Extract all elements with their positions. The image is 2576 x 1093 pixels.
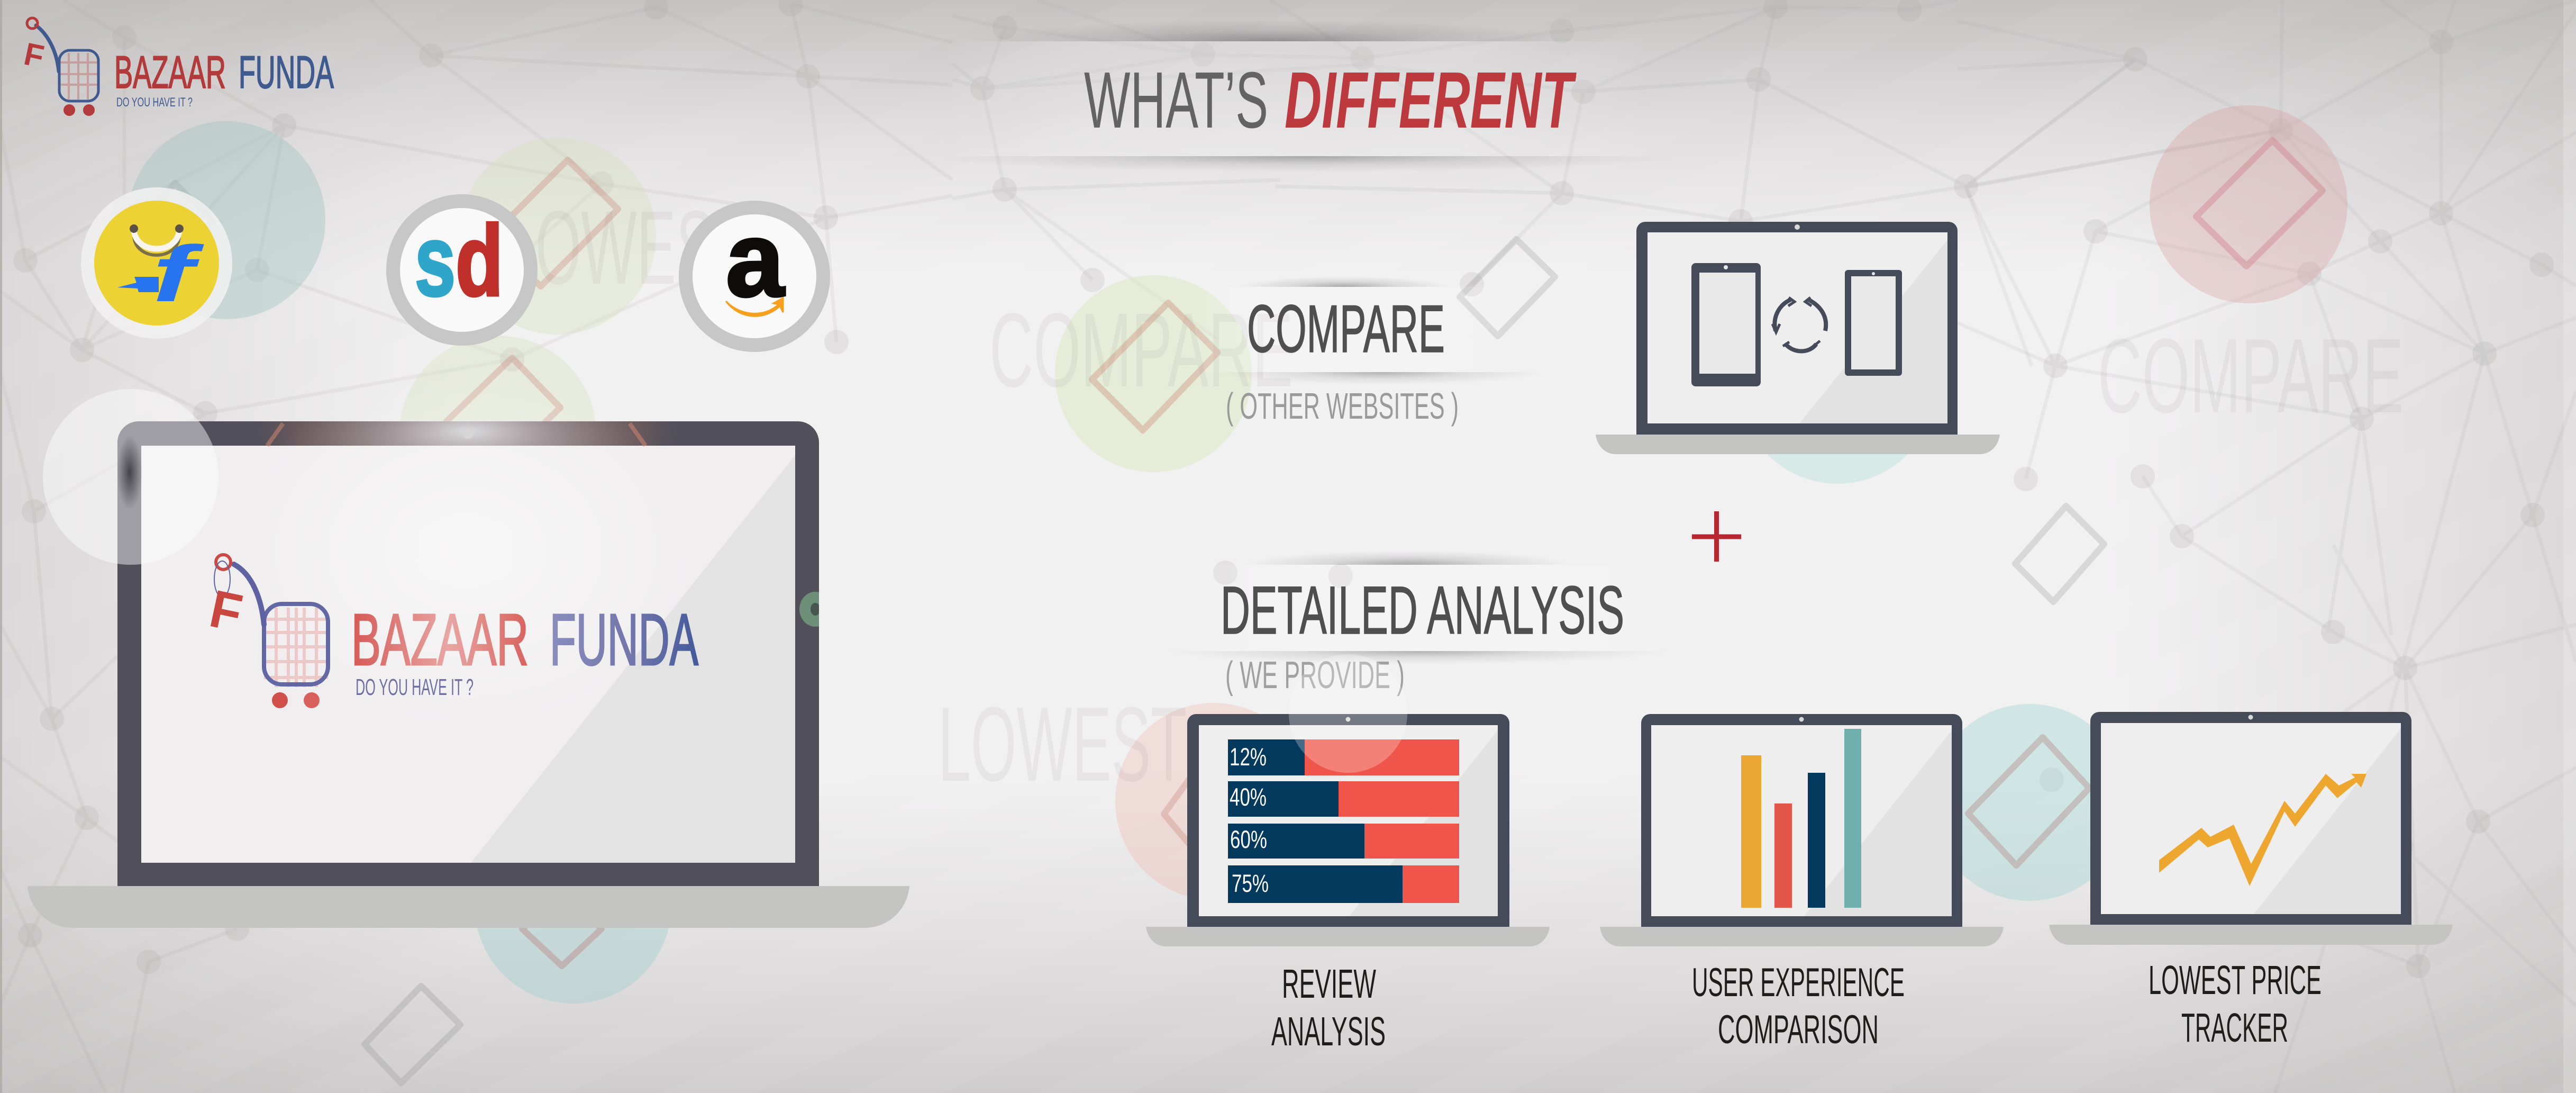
logo: Bazaar Funda small: BAZAAR — [114, 47, 226, 98]
bar 40% — [1228, 781, 1459, 817]
heading: compare — [1180, 266, 1545, 427]
snapdeal badge: d — [456, 205, 503, 317]
flipkart badge: f — [152, 229, 204, 318]
green lens spot — [799, 592, 819, 627]
logo on screen — [205, 555, 698, 708]
logo: Bazaar Funda small — [21, 18, 334, 116]
heading: compare: ( OTHER WEBSITES ) — [1226, 385, 1459, 427]
caption: lowest price tracker: TRACKER — [2181, 1005, 2288, 1051]
logo on screen: FUNDA — [550, 599, 698, 681]
title band — [942, 41, 1651, 156]
flipkart badge — [81, 187, 232, 339]
icon: large phone — [1691, 263, 1761, 386]
watermark words: LOWEST — [938, 685, 1187, 803]
laptop: review analysis bars — [1146, 714, 1550, 946]
snapdeal badge: s — [415, 205, 456, 317]
caption: lowest price tracker: LOWEST PRICE — [2149, 957, 2322, 1003]
title: DIFFERENT — [1285, 55, 1577, 144]
heading: detailed analysis — [1164, 536, 1682, 697]
icon: cycle arrows — [1772, 297, 1826, 351]
watermark words: LOWEST — [503, 189, 751, 306]
laptop: user experience bar chart — [1600, 714, 2004, 946]
caption: review analysis: REVIEW — [1282, 961, 1376, 1007]
logo: Bazaar Funda small: DO YOU HAVE IT ? — [116, 95, 193, 110]
white bubble over review laptop — [1289, 654, 1407, 773]
network pattern lines — [0, 0, 952, 1093]
watermark words: COMPARE — [989, 292, 1293, 409]
watermark words — [503, 189, 2404, 803]
logo: Bazaar Funda small: FUNDA — [239, 47, 334, 98]
bar chart — [1741, 729, 1861, 908]
caption: user experience comparison: COMPARISON — [1718, 1007, 1879, 1052]
caption: review analysis — [1271, 961, 1386, 1054]
bar 12%: 12% — [1230, 743, 1267, 771]
watermark tablet icons — [115, 140, 2323, 1083]
heading: detailed analysis: DETAILED ANALYSIS — [1221, 573, 1624, 648]
logo: Bazaar Funda small: F — [21, 36, 47, 75]
plus sign — [1692, 511, 1741, 562]
white bubble over laptop — [43, 389, 219, 565]
caption: user experience comparison: USER EXPERIENCE — [1692, 960, 1905, 1005]
laptop: main with Bazaar Funda logo — [28, 363, 909, 928]
laptop body — [117, 421, 819, 886]
line chart arrow — [2159, 774, 2366, 886]
caption: user experience comparison — [1692, 960, 1905, 1052]
watermark circles — [128, 105, 2347, 1004]
bar 12% — [1228, 739, 1459, 775]
caption: lowest price tracker — [2149, 957, 2322, 1051]
laptop: lowest price tracker chart — [2049, 712, 2453, 945]
icon: small phone — [1845, 270, 1902, 376]
snapdeal badge — [393, 201, 531, 339]
laptop base — [28, 886, 909, 928]
laptop screen — [141, 446, 795, 863]
amazon badge: a — [726, 201, 785, 319]
title — [936, 0, 1677, 188]
bar 60% — [1228, 824, 1459, 859]
heading: compare: COMPARE — [1247, 291, 1445, 366]
heading: detailed analysis: ( WE PROVIDE ) — [1225, 654, 1405, 697]
caption: review analysis: ANALYSIS — [1271, 1009, 1386, 1054]
bar 40%: 40% — [1230, 783, 1267, 811]
bar 60%: 60% — [1230, 825, 1267, 853]
laptop: compare devices — [1596, 222, 2000, 454]
title text: WHAT’S — [1084, 55, 1268, 144]
logo on screen: BAZAAR — [351, 599, 529, 681]
amazon badge — [686, 201, 823, 345]
bar 75%: 75% — [1232, 869, 1269, 897]
laptop camera — [463, 428, 474, 439]
logo on screen: F — [205, 579, 247, 643]
logo on screen: DO YOU HAVE IT ? — [356, 674, 474, 700]
bar 75% — [1228, 865, 1459, 903]
